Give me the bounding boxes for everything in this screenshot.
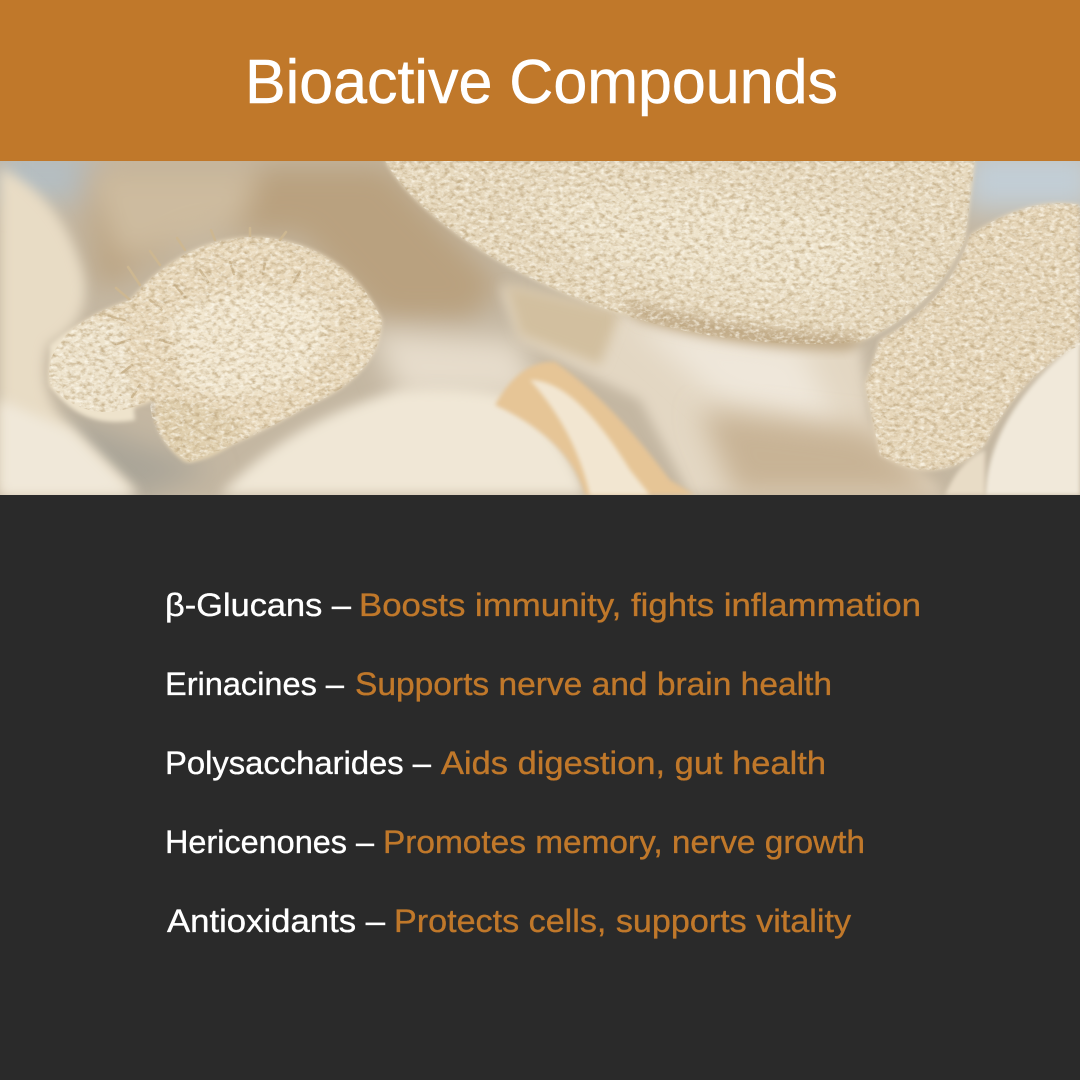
item: antioxidants: Antioxidants – xyxy=(167,903,385,939)
item: beta-glucans: Boosts immunity, fights inflammation xyxy=(359,587,921,623)
right mushroom xyxy=(865,203,1080,470)
item: beta-glucans xyxy=(165,587,921,623)
item: antioxidants xyxy=(167,903,851,939)
furry texture xyxy=(49,161,1080,470)
title: Bioactive Compounds xyxy=(245,48,838,117)
compound list xyxy=(165,587,921,939)
small mushroom spines xyxy=(109,228,300,397)
item: antioxidants: Protects cells, supports vitality xyxy=(394,903,851,939)
item: polysaccharides xyxy=(165,745,826,781)
item: hericenones xyxy=(165,824,865,860)
item: erinacines: Supports nerve and brain health xyxy=(355,666,832,702)
photo: lion's mane mushrooms xyxy=(0,150,1080,500)
item: beta-glucans: β-Glucans – xyxy=(165,587,351,623)
item: polysaccharides: Polysaccharides – xyxy=(165,745,431,781)
item: hericenones: Hericenones – xyxy=(165,824,374,860)
item: erinacines: Erinacines – xyxy=(165,666,344,702)
left mushroom xyxy=(0,168,140,495)
item: hericenones: Promotes memory, nerve growth xyxy=(383,824,865,860)
top large mushroom xyxy=(385,161,975,344)
front cap xyxy=(220,389,585,495)
background tones xyxy=(0,150,1080,500)
item: polysaccharides: Aids digestion, gut health xyxy=(441,745,826,781)
item: erinacines xyxy=(165,666,832,702)
central stem xyxy=(500,285,945,495)
title banner xyxy=(0,0,1080,161)
small mushroom xyxy=(49,237,382,462)
torn piece xyxy=(495,362,695,495)
